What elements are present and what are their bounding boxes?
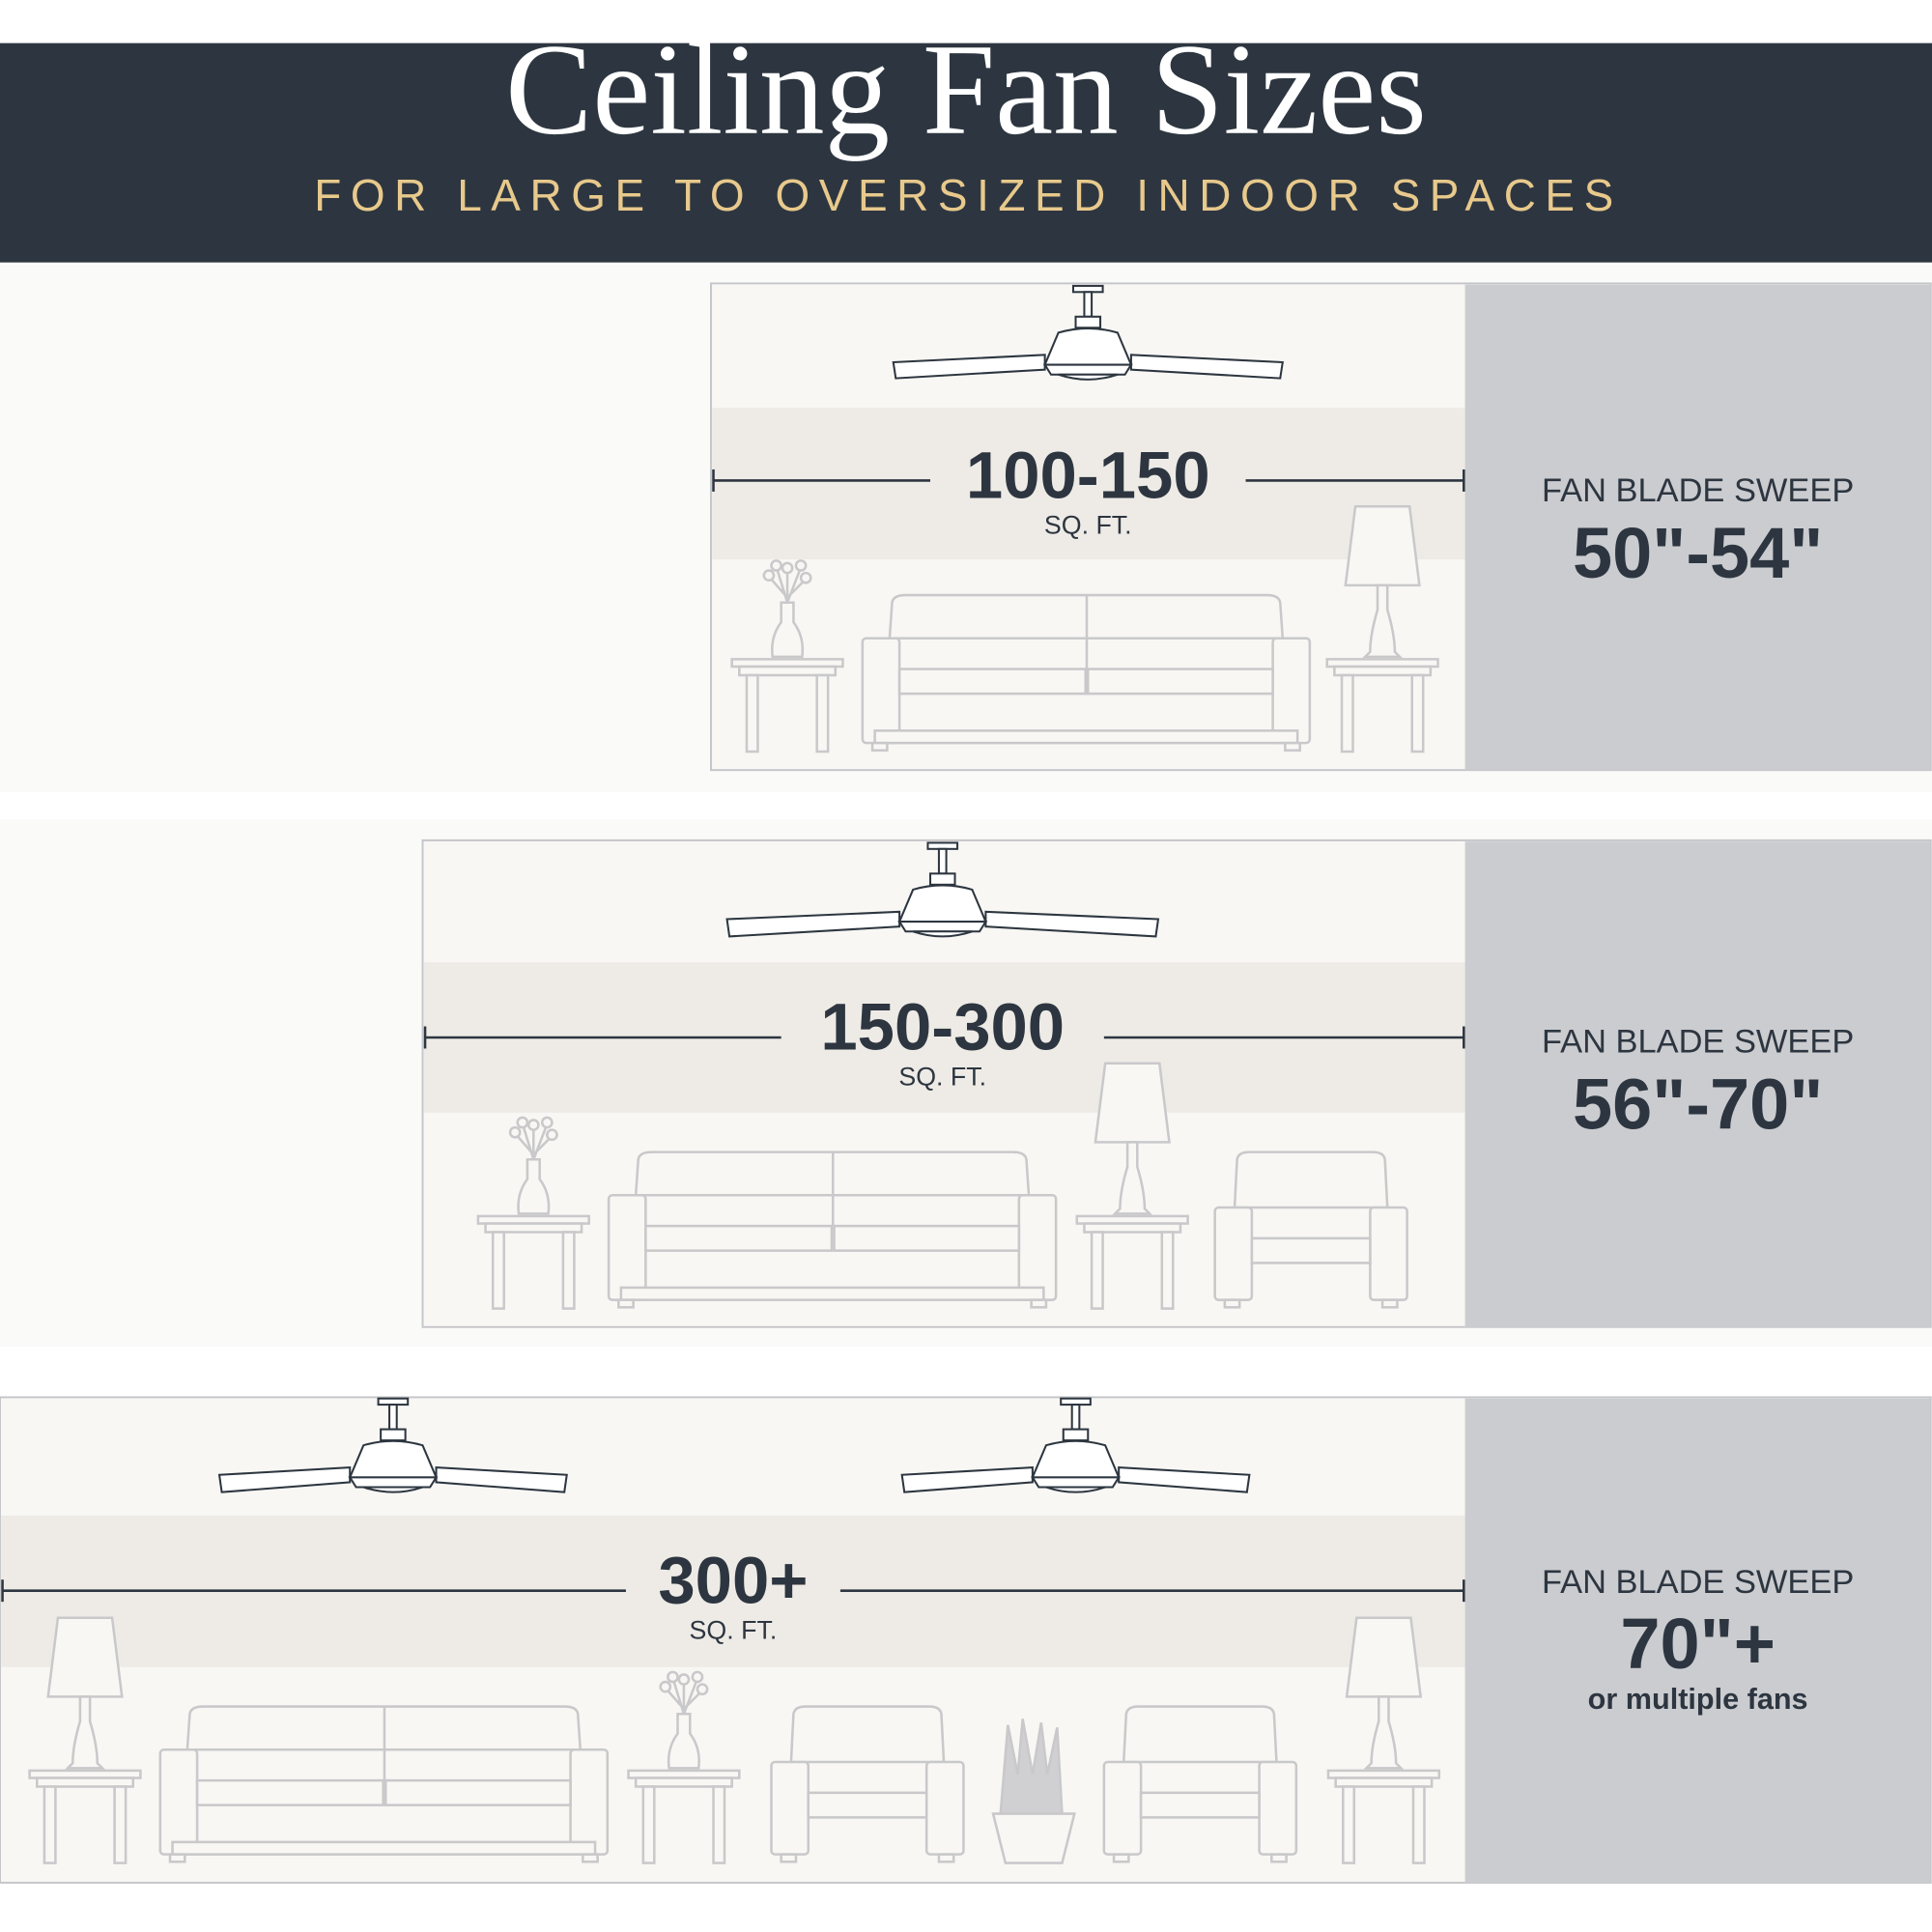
measure line [425,1026,1463,1048]
measure line [3,1579,1463,1602]
fan [727,842,1158,936]
header banner [0,18,1932,263]
area label: SQ. FT. [898,1063,986,1092]
furniture [478,1064,1407,1309]
sweep label [1542,1023,1854,1144]
measure line [714,469,1463,492]
furniture [732,506,1438,752]
fans [219,1399,1249,1492]
area label: SQ. FT. [690,1615,777,1644]
sweep label: 50"-54" [1573,513,1823,593]
area label: 150-300 [820,990,1065,1065]
sweep label [1542,1564,1854,1716]
row backgrounds [0,265,1932,792]
sweep label: 70"+ [1620,1604,1776,1684]
fan [894,286,1283,380]
area label: 300+ [658,1543,808,1617]
sweep label: FAN BLADE SWEEP [1542,472,1854,509]
sweep label: FAN BLADE SWEEP [1542,1564,1854,1601]
sweep label: or multiple fans [1588,1683,1808,1716]
panel: 150-300 sq ft [423,840,1931,1327]
subtitle: FOR LARGE TO OVERSIZED INDOOR SPACES [314,170,1623,220]
title: Ceiling Fan Sizes [505,18,1427,162]
panel: 300+ sq ft [0,1397,1931,1883]
area label: SQ. FT. [1044,510,1132,539]
sweep label [1542,472,1854,593]
panel: 100-150 sq ft [711,283,1931,770]
furniture [30,1618,1439,1863]
sweep label: FAN BLADE SWEEP [1542,1023,1854,1060]
area label: 100-150 [966,438,1210,512]
sweep label: 56"-70" [1573,1064,1823,1144]
